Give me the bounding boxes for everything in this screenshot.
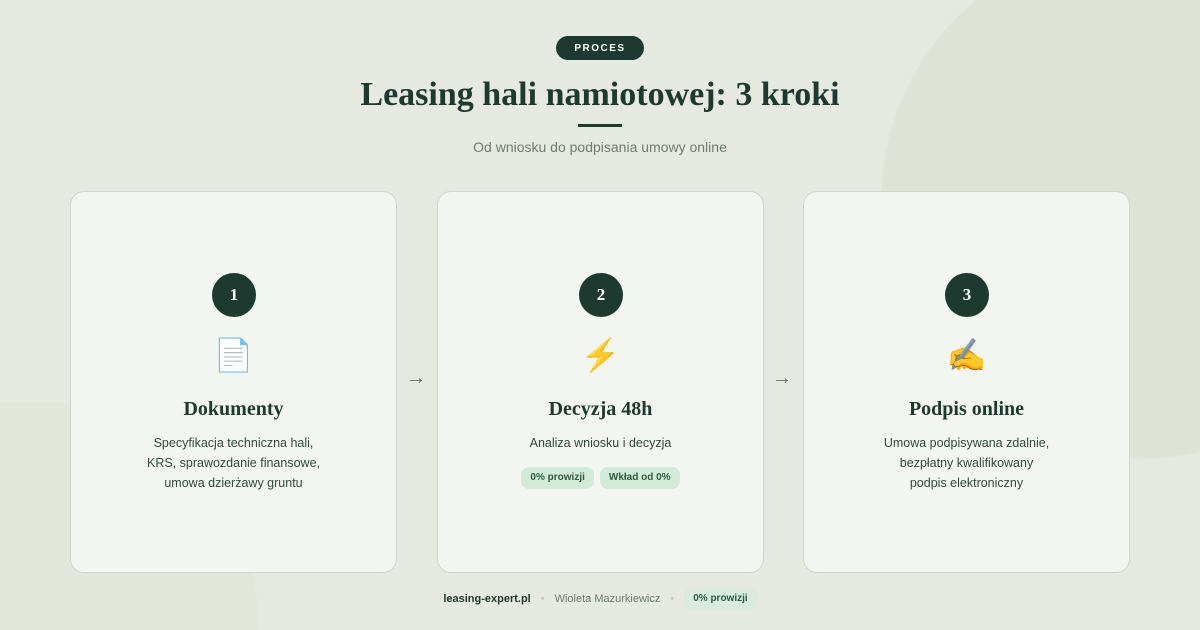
tags: Wkład od 0% — [609, 472, 671, 483]
text: signature description — [884, 436, 1049, 490]
panel: step 1 — [70, 191, 397, 573]
heading: Decyzja 48h: Decyzja 48h — [549, 398, 652, 420]
footer: • — [670, 593, 674, 605]
text: decision description: Analiza wniosku i decyzja — [530, 436, 671, 450]
footer: • — [541, 593, 545, 605]
icon: writing hand: ✍️ — [947, 337, 986, 373]
footer: 0% prowizji — [693, 593, 748, 604]
panel: step 2 — [437, 191, 764, 573]
badge: proces: PROCES — [574, 42, 626, 54]
step number 1 — [212, 273, 256, 317]
icon: lightning: ⚡ — [581, 337, 620, 373]
step number 2: 2 — [597, 285, 605, 304]
panel: step 3 — [803, 191, 1130, 573]
tags — [521, 467, 680, 489]
badge: proces — [556, 36, 644, 60]
footer: Wioleta Mazurkiewicz — [555, 593, 660, 605]
text: signature description: Umowa podpisywana zdalnie, — [884, 436, 1049, 450]
arrow 1: → — [406, 367, 426, 389]
icon: document: 📄 — [214, 337, 253, 373]
step number 2 — [579, 273, 623, 317]
text: signature description: podpis elektroniczny — [910, 476, 1023, 490]
subtitle: Od wniosku do podpisania umowy online — [473, 139, 727, 155]
title: Leasing hali namiotowej: 3 kroki — [360, 76, 840, 113]
text: signature description: bezpłatny kwalifikowany — [900, 456, 1033, 470]
step number 3 — [945, 273, 989, 317]
text: documents description: KRS, sprawozdanie finansowe, — [147, 456, 320, 470]
heading: Podpis online: Podpis online — [909, 398, 1024, 420]
step number 3: 3 — [963, 285, 971, 304]
text: documents description: umowa dzierżawy gruntu — [164, 476, 303, 490]
text: documents description — [147, 436, 320, 490]
step number 1: 1 — [230, 285, 238, 304]
text: documents description: Specyfikacja techniczna hali, — [154, 436, 313, 450]
tags: 0% prowizji — [530, 472, 585, 483]
footer: leasing-expert.pl — [443, 593, 531, 605]
arrow 2: → — [772, 367, 792, 389]
heading: Dokumenty: Dokumenty — [183, 398, 284, 420]
footer — [443, 588, 757, 610]
